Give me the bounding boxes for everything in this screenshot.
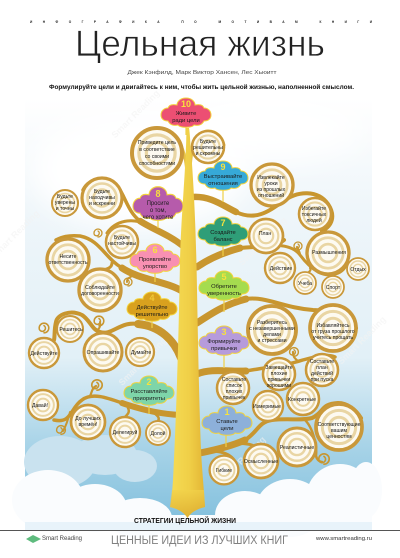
circle: Несите ответственность: ответственность (48, 260, 88, 266)
circle: Составьте список: Составьте (222, 377, 246, 383)
circle: Делай: Давай! (32, 402, 48, 409)
circle: Будьте решительны (192, 131, 224, 163)
authors: Джек Кэнфилд, Марк Виктор Хансен, Лес Хьюитт (128, 70, 277, 76)
badge 10: Живите (176, 111, 196, 117)
circle: Гибкие: Гибкие (216, 468, 232, 474)
circle: Думайте (126, 338, 154, 366)
circle: Будьте настойчивы (106, 226, 138, 258)
circle: Будьте уверены (52, 190, 78, 216)
circle: Будьте решительны: и скромны (196, 151, 221, 157)
circle: Действие (265, 253, 295, 283)
circle: Будьте находчивы: Будьте (94, 189, 110, 195)
circle: Будьте решительны: Будьте (200, 139, 216, 145)
circle: План (249, 219, 283, 253)
trunk tip (170, 490, 205, 518)
circle: Избегайте токсичных людей (299, 198, 331, 230)
circle: Избавляйтесь: Избавляйтесь (316, 322, 350, 329)
circle: Составьте план: действий (311, 370, 333, 377)
badge 10 (161, 98, 211, 127)
badge 1: 1 (224, 407, 230, 417)
circle: Будьте находчивы: и искренни (89, 201, 115, 207)
watermarks: Smart Reading (336, 314, 388, 366)
circle: Будьте настойчивы: Будьте (114, 235, 130, 241)
badge 4: Действуйте (137, 304, 167, 311)
circle: Измеримые: Измеримые (253, 404, 281, 410)
badge 2: 2 (146, 377, 152, 387)
badge 7 (198, 217, 248, 246)
circle: Действуйте (29, 338, 59, 368)
badge 5: уверенность (207, 291, 241, 297)
circle: Несите ответственность (47, 239, 89, 281)
circle: Будьте находчивы (82, 178, 122, 218)
badge 6: упорство (143, 264, 167, 270)
badge 2: приоритеты (133, 396, 165, 402)
circle: Составьте план: при пуска (311, 377, 334, 383)
circle: Извлекайте уроки (251, 164, 293, 206)
circle: Будьте настойчивы: настойчивы (108, 240, 136, 247)
circle: Разберитесь (248, 306, 296, 354)
badge 10: 10 (181, 99, 191, 109)
badge 6 (130, 244, 180, 273)
circle: Извлекайте уроки: Извлекайте (257, 174, 285, 181)
circle: Решитесь: Решитесь (59, 327, 83, 333)
circle: Извлекайте уроки: уроки (264, 181, 278, 187)
circle: Соответствующие: ценностям (326, 434, 352, 440)
circle: Соответствующие: Соответствующие (318, 422, 361, 428)
tree caption: СТРАТЕГИИ ЦЕЛЬНОЙ ЖИЗНИ (134, 516, 236, 525)
circle: Спорт: Спорт (326, 285, 341, 291)
circle: Составьте список: плохих (226, 389, 243, 395)
circle: Осмысленные: Осмысленные (244, 459, 278, 465)
circle: Приведите цель (132, 128, 182, 178)
circle: Долой: Долой (151, 430, 166, 437)
badge 4: решительно (136, 312, 168, 318)
badge 5: 5 (221, 272, 227, 282)
circle: Соблюдайте договоренности: Соблюдайте (85, 284, 115, 291)
circle: Конкретные (287, 383, 319, 415)
circle: Составьте список: привычек (223, 395, 246, 401)
circle: Реалистичные: Реалистичные (280, 445, 314, 451)
badge 9 (198, 161, 248, 190)
circle: Замещайте: Замещайте (265, 364, 293, 371)
badge 8: о том, (150, 207, 166, 214)
panel: sky background (25, 98, 372, 530)
circle: Измеримые (253, 391, 283, 421)
circle: Решитесь (57, 316, 83, 342)
circle: Составьте план (306, 354, 338, 386)
circle: Разберитесь: и стрессами (257, 338, 287, 344)
badge 10: ради цели (172, 118, 200, 124)
footer website: www.smartreading.ru (315, 536, 372, 542)
subtitle: Формулируйте цели и двигайтесь к ним, чтобы жить цельной жизнью, наполненной смыслом. (49, 83, 354, 91)
circle: Делегируй: Делегируй (113, 429, 138, 436)
circle: Замещайте: хорошими (267, 383, 291, 389)
circle: Избавляйтесь: учитесь прощать (313, 335, 353, 341)
badge 2: Расставляйте (130, 388, 168, 395)
badge 7: баланс (213, 237, 233, 243)
circle: Замещайте: плохие (271, 371, 288, 377)
circle: Будьте уверены: уверены (55, 200, 75, 206)
tree (39, 128, 361, 518)
circle: Соблюдайте договоренности: договоренности (81, 291, 119, 297)
circle: Отдых: Отдых (350, 267, 366, 273)
circle: Опрашивайте (84, 333, 122, 371)
badge 7: 7 (220, 218, 226, 228)
watermarks: Smart Reading (117, 335, 169, 387)
circle: Составьте список (217, 372, 249, 404)
circle: Разберитесь: с незавершенными (249, 326, 295, 332)
badge 4 (127, 292, 177, 321)
circle: Размышления: Размышления (312, 250, 346, 256)
badge 8: 8 (155, 189, 161, 200)
badge 7: Создайте (210, 229, 236, 236)
badge stems (149, 127, 226, 447)
trunk (170, 128, 205, 518)
branches right (193, 193, 361, 470)
badge 5: Обретите (211, 284, 237, 290)
badge 6: Проявляйте (139, 256, 171, 263)
badge 2 (124, 376, 174, 405)
watermarks (0, 88, 388, 486)
circle: Действие: Действие (270, 265, 292, 272)
clouds (12, 435, 382, 539)
watermarks: Smart Reading (237, 215, 289, 267)
badge 8 (133, 187, 183, 221)
circle: Учеба (294, 272, 316, 294)
badge 8: Просите (147, 200, 170, 207)
pale clouds in the sky (24, 435, 157, 488)
header label: ИНФОГРАФИКА ПО МОТИВАМ КНИГИ (30, 20, 373, 24)
circle: Избегайте токсичных людей: токсичных (302, 212, 327, 218)
circle: Извлекайте уроки: из прошлых (257, 187, 286, 193)
circle: Соответствующие (316, 404, 362, 450)
circle: Приведите цель: в соответствие (139, 147, 175, 153)
circle: План: План (259, 231, 271, 237)
badge 6: 6 (152, 245, 158, 255)
circle: Делегируй (110, 417, 140, 447)
circle: Размышления (307, 232, 349, 274)
circle: Думайте: Думайте (131, 349, 151, 356)
circle: Отдых (347, 258, 369, 280)
badge 1 (202, 406, 252, 435)
circle: До лучших времён: До лучших (75, 416, 101, 422)
circle: Замещайте (263, 358, 295, 390)
circle: Спорт (322, 276, 344, 298)
circle: Конкретные: Конкретные (288, 397, 316, 403)
circle: Разберитесь: Разберитесь (257, 320, 287, 326)
badge 9: Выстраивайте (204, 173, 242, 180)
circle: Избавляйтесь (310, 305, 356, 351)
circle: Составьте список: список (226, 383, 243, 389)
circle: Гибкие (210, 456, 238, 484)
footer divider (0, 530, 400, 531)
circle: До лучших времён: времён! (79, 422, 97, 428)
circle: Действуйте: Действуйте (30, 350, 58, 357)
circle: Соблюдайте договоренности (79, 269, 121, 311)
circle: Несите ответственность: Несите (59, 254, 77, 260)
badge 5 (199, 271, 249, 300)
badge 1: цели (221, 426, 233, 432)
circle: Реалистичные (278, 428, 316, 466)
badge 1: Ставьте (216, 419, 238, 425)
title: Цельная жизнь (75, 22, 325, 64)
circle: Делай (28, 390, 58, 420)
badge 3 (199, 326, 249, 355)
circle: Учеба: Учеба (298, 281, 312, 287)
circle: Приведите цель: со своими (145, 154, 169, 160)
circle: Избавляйтесь: от груза прошлого (311, 329, 355, 335)
circle: Будьте уверены: и точны (56, 206, 75, 212)
top arcs of the crown (132, 129, 224, 175)
circle: Приведите цель: способностями (139, 161, 175, 167)
circle: Опрашивайте: Опрашивайте (87, 349, 120, 356)
badge 4: 4 (149, 293, 155, 303)
circle: Приведите цель: Приведите цель (138, 140, 176, 146)
circle: Составьте план: план (316, 365, 328, 371)
badge 8: чего хотите (143, 214, 174, 221)
circle: Избегайте токсичных людей: людей (306, 217, 322, 224)
circle: Долой (146, 421, 170, 445)
circle: Будьте решительны: решительны (193, 145, 223, 151)
circle: Замещайте: привычки (268, 377, 290, 383)
badge 9: отношения (208, 181, 238, 187)
brand name: Smart Reading (42, 535, 82, 542)
circle: Будьте находчивы: находчивы (89, 195, 115, 201)
circle: Будьте уверены: Будьте (57, 194, 73, 200)
watermarks: Smart Reading (109, 88, 161, 140)
circle: Соответствующие: вашим (331, 428, 347, 434)
badge 3: привычки (211, 346, 237, 352)
white clouds at the bottom (12, 462, 382, 539)
circle: Разберитесь: делами (263, 332, 281, 338)
circle: Извлекайте уроки: отношений (258, 192, 284, 199)
circle: Составьте план: Составьте (310, 359, 334, 365)
badge 3: Формируйте (207, 338, 241, 345)
circle: Избегайте токсичных людей: Избегайте (302, 205, 326, 212)
circle: До лучших времён (71, 405, 105, 439)
badge 9: 9 (220, 162, 226, 172)
footer slogan: ЦЕННЫЕ ИДЕИ ИЗ ЛУЧШИХ КНИГ (111, 535, 289, 547)
icon: book (26, 535, 41, 543)
circle: Осмысленные (244, 444, 278, 478)
small curls (39, 229, 329, 464)
footer logo (26, 535, 82, 543)
branches left (54, 179, 183, 431)
badge 3: 3 (221, 327, 227, 337)
watermarks: Smart Reading (216, 434, 268, 486)
